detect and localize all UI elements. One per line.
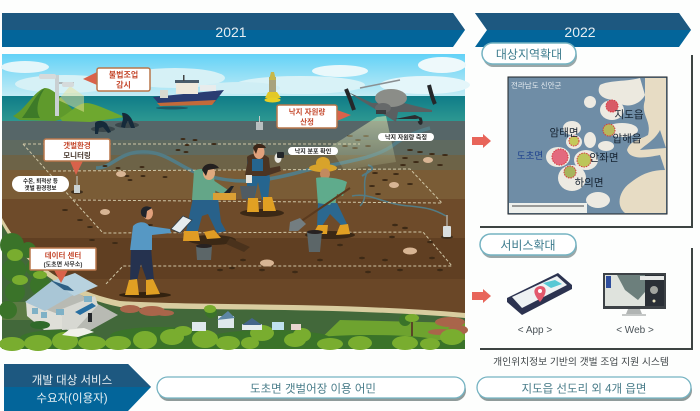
pill: Dochomyeon fishers: [157, 377, 466, 401]
distant fishers: [91, 113, 139, 134]
callout: illegal fishing monitoring: 감시: [116, 80, 131, 90]
drone: [346, 80, 435, 123]
navigation buoy: [264, 72, 281, 102]
banner: target service users: 개발 대상 서비스: [32, 374, 112, 387]
panel: tidal flat scene: [0, 54, 470, 351]
label: octopus distribution check: [288, 147, 338, 156]
data center building: [25, 273, 118, 337]
callout: data center: [30, 248, 96, 283]
label: octopus resource measurement: [378, 133, 434, 142]
label: environment info: 수온, 퇴적상 등: [23, 177, 58, 185]
tree line: [0, 233, 465, 351]
pill: Dochomyeon fishers: 도초면 갯벌어장 이용 어민: [250, 382, 376, 396]
worker with laptop: [183, 164, 236, 245]
callout: illegal fishing monitoring: 불법조업: [109, 70, 138, 80]
arrow: to map: [472, 134, 491, 148]
mainland: [620, 78, 666, 213]
callout: octopus resource estimation: 낙지 자원량: [289, 106, 325, 116]
creek: [96, 128, 446, 216]
pill: service expansion: 서비스확대: [500, 238, 556, 252]
township labels: 도초면: [517, 151, 543, 162]
callout: illegal fishing monitoring: [83, 68, 150, 91]
tidal flat bands: [2, 121, 465, 329]
township labels: 하의면: [575, 176, 603, 189]
township labels: 압해읍: [613, 132, 642, 145]
banner: 2021: [2, 13, 465, 47]
township labels: 안좌면: [590, 152, 618, 164]
worker with tablet: [119, 206, 192, 298]
callout: tidal flat monitoring: 갯벌환경: [63, 140, 91, 150]
callout: data center: (도초면 사무소): [44, 260, 82, 268]
callout: data center: 데이터 센터: [45, 250, 81, 260]
worker with straw hat and shovel: [289, 157, 355, 239]
drone light cone: [330, 116, 396, 170]
pill: target area expansion: [482, 43, 577, 67]
map of Sinan-gun: [508, 77, 667, 214]
icon: web monitor: [603, 273, 666, 316]
marked township circles: [552, 100, 618, 178]
islands: [546, 96, 638, 208]
small houses: [192, 311, 301, 331]
sensor posts: [71, 116, 453, 239]
mud buckets: [196, 230, 323, 260]
octopus catch marks: [100, 157, 433, 266]
scale bar: [509, 203, 587, 213]
sky with clouds: [1, 54, 470, 96]
banner: target service users: 수요자(이용자): [36, 392, 108, 405]
sea: [2, 96, 465, 123]
township labels: [517, 109, 644, 189]
township labels: 지도읍: [615, 109, 644, 121]
grass ground: [2, 224, 465, 349]
pill: Jido-eup and townships: [477, 377, 692, 401]
callout: octopus resource estimation: [277, 105, 351, 128]
islands and surveillance camera: [13, 74, 125, 122]
label: Web: < Web >: [616, 325, 654, 336]
township labels: 암태면: [550, 127, 578, 139]
frame: target area: [480, 55, 692, 227]
callout: tidal flat monitoring: [44, 139, 110, 175]
rocks on shore: [120, 305, 468, 335]
banner: 2022: [475, 13, 691, 47]
label: octopus distribution check: 낙지 분포 확인: [295, 148, 331, 156]
dashed survey grids: [23, 144, 452, 285]
pill: target area expansion: 대상지역확대: [496, 48, 562, 62]
banner: 2021: 2021: [215, 24, 247, 40]
banner: 2022: 2022: [564, 24, 596, 40]
callout: octopus resource estimation: 산정: [300, 116, 314, 126]
frame: service: [480, 248, 692, 349]
icon: smartphone app: [507, 273, 572, 315]
map title: 전라남도 신안군: [511, 80, 561, 90]
label: octopus resource measurement: 낙지 자원량 측정: [385, 134, 427, 142]
pill: Jido-eup and townships: 지도읍 선도리 외 4개 읍면: [522, 382, 646, 396]
tidal flat backdrop: [2, 121, 465, 349]
worker with phone: [240, 144, 284, 217]
callout: tidal flat monitoring: 모니터링: [63, 150, 91, 160]
label: environment info: 갯벌 환경정보: [25, 184, 56, 192]
shore sand: [2, 218, 465, 349]
caption: location-based support system: 개인위치정보 기반의 갯벌 조업 지원 시스템: [493, 355, 669, 368]
banner: target service users: [4, 364, 151, 411]
label: App: < App >: [518, 325, 552, 336]
pill: service expansion: [480, 234, 577, 258]
octopus burrows: [62, 135, 448, 273]
patrol boat: [153, 75, 224, 110]
label: environment info: [12, 176, 69, 192]
arrow: to service: [472, 289, 491, 303]
